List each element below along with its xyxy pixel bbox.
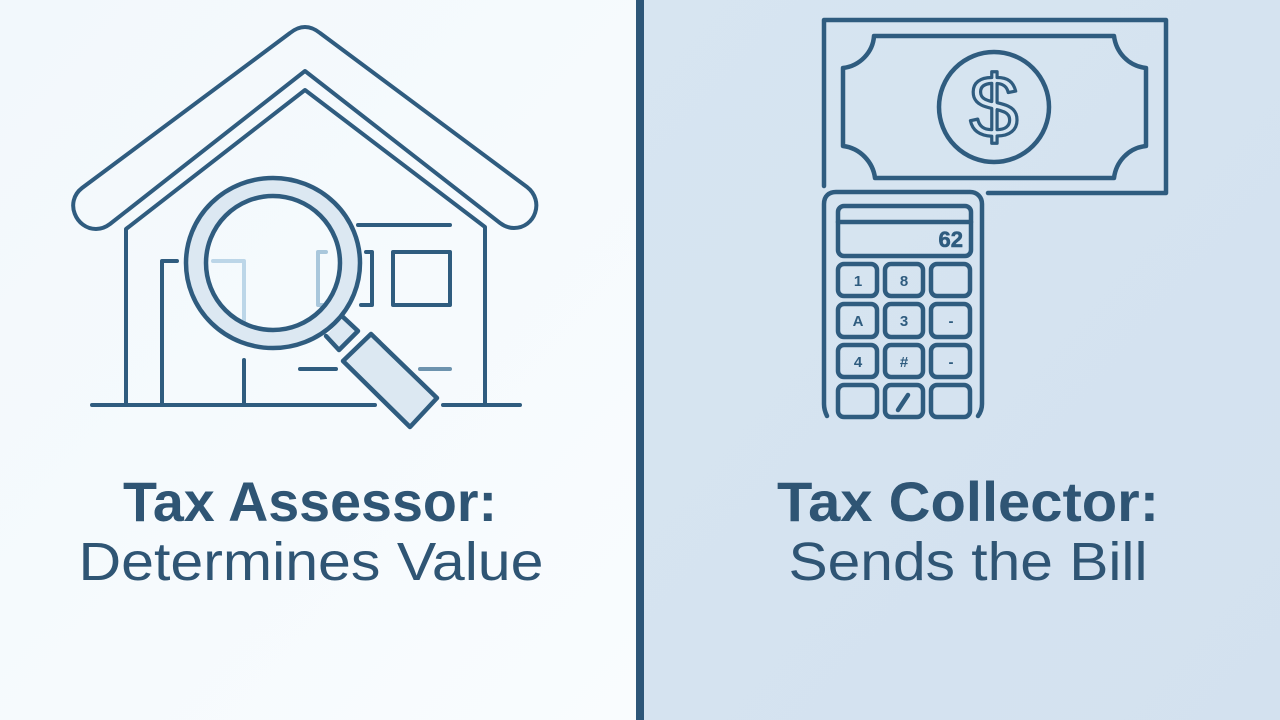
- key glyphs: 1: [854, 273, 862, 290]
- faded door behind lens: [213, 261, 244, 325]
- house window: [393, 252, 450, 305]
- key glyphs: 4: [854, 354, 863, 371]
- heading: assessor: Tax Assessor:: [123, 470, 497, 533]
- heading: assessor: [78, 470, 544, 592]
- faded window behind lens: [318, 252, 326, 305]
- magnifier neck: [326, 317, 358, 350]
- magnifier ring: [186, 178, 360, 348]
- heading: collector: Tax Collector:: [777, 470, 1159, 533]
- calculator keys: [838, 264, 970, 417]
- subheading: collector: Sends the Bill: [788, 532, 1148, 592]
- window bracket: [361, 252, 372, 305]
- key glyphs: -: [948, 354, 954, 371]
- icon: banknote: [824, 20, 1166, 193]
- key glyphs: A: [853, 313, 864, 330]
- subheading: assessor: Determines Value: [78, 532, 544, 592]
- key glyphs: -: [948, 313, 954, 330]
- dollar sign: $: [970, 57, 1018, 156]
- key glyphs: [853, 273, 954, 371]
- panel: assessor background: [0, 0, 637, 720]
- key glyphs: #: [900, 354, 909, 371]
- house upper line: [358, 223, 450, 227]
- calculator display: [838, 206, 971, 256]
- heading: collector: [777, 470, 1159, 592]
- icon: calculator: [824, 192, 982, 417]
- panel: collector background: [643, 0, 1280, 720]
- key glyphs: 3: [900, 313, 908, 330]
- house lower lines: [300, 367, 336, 371]
- house door: [162, 261, 244, 405]
- bill coin: [939, 52, 1049, 162]
- house roof: [73, 27, 536, 229]
- slash key: [898, 395, 908, 410]
- icon: house with magnifying glass: [73, 27, 536, 427]
- calculator body: [824, 192, 982, 416]
- key glyphs: 8: [900, 273, 908, 290]
- faded lower line: [420, 367, 450, 371]
- magnifier handle: [343, 334, 437, 427]
- bill outer frame: [824, 20, 1166, 193]
- display number: 62: [939, 227, 963, 252]
- house walls and ground: [92, 90, 520, 405]
- center divider: [636, 0, 644, 720]
- bill inner frame: [843, 36, 1146, 178]
